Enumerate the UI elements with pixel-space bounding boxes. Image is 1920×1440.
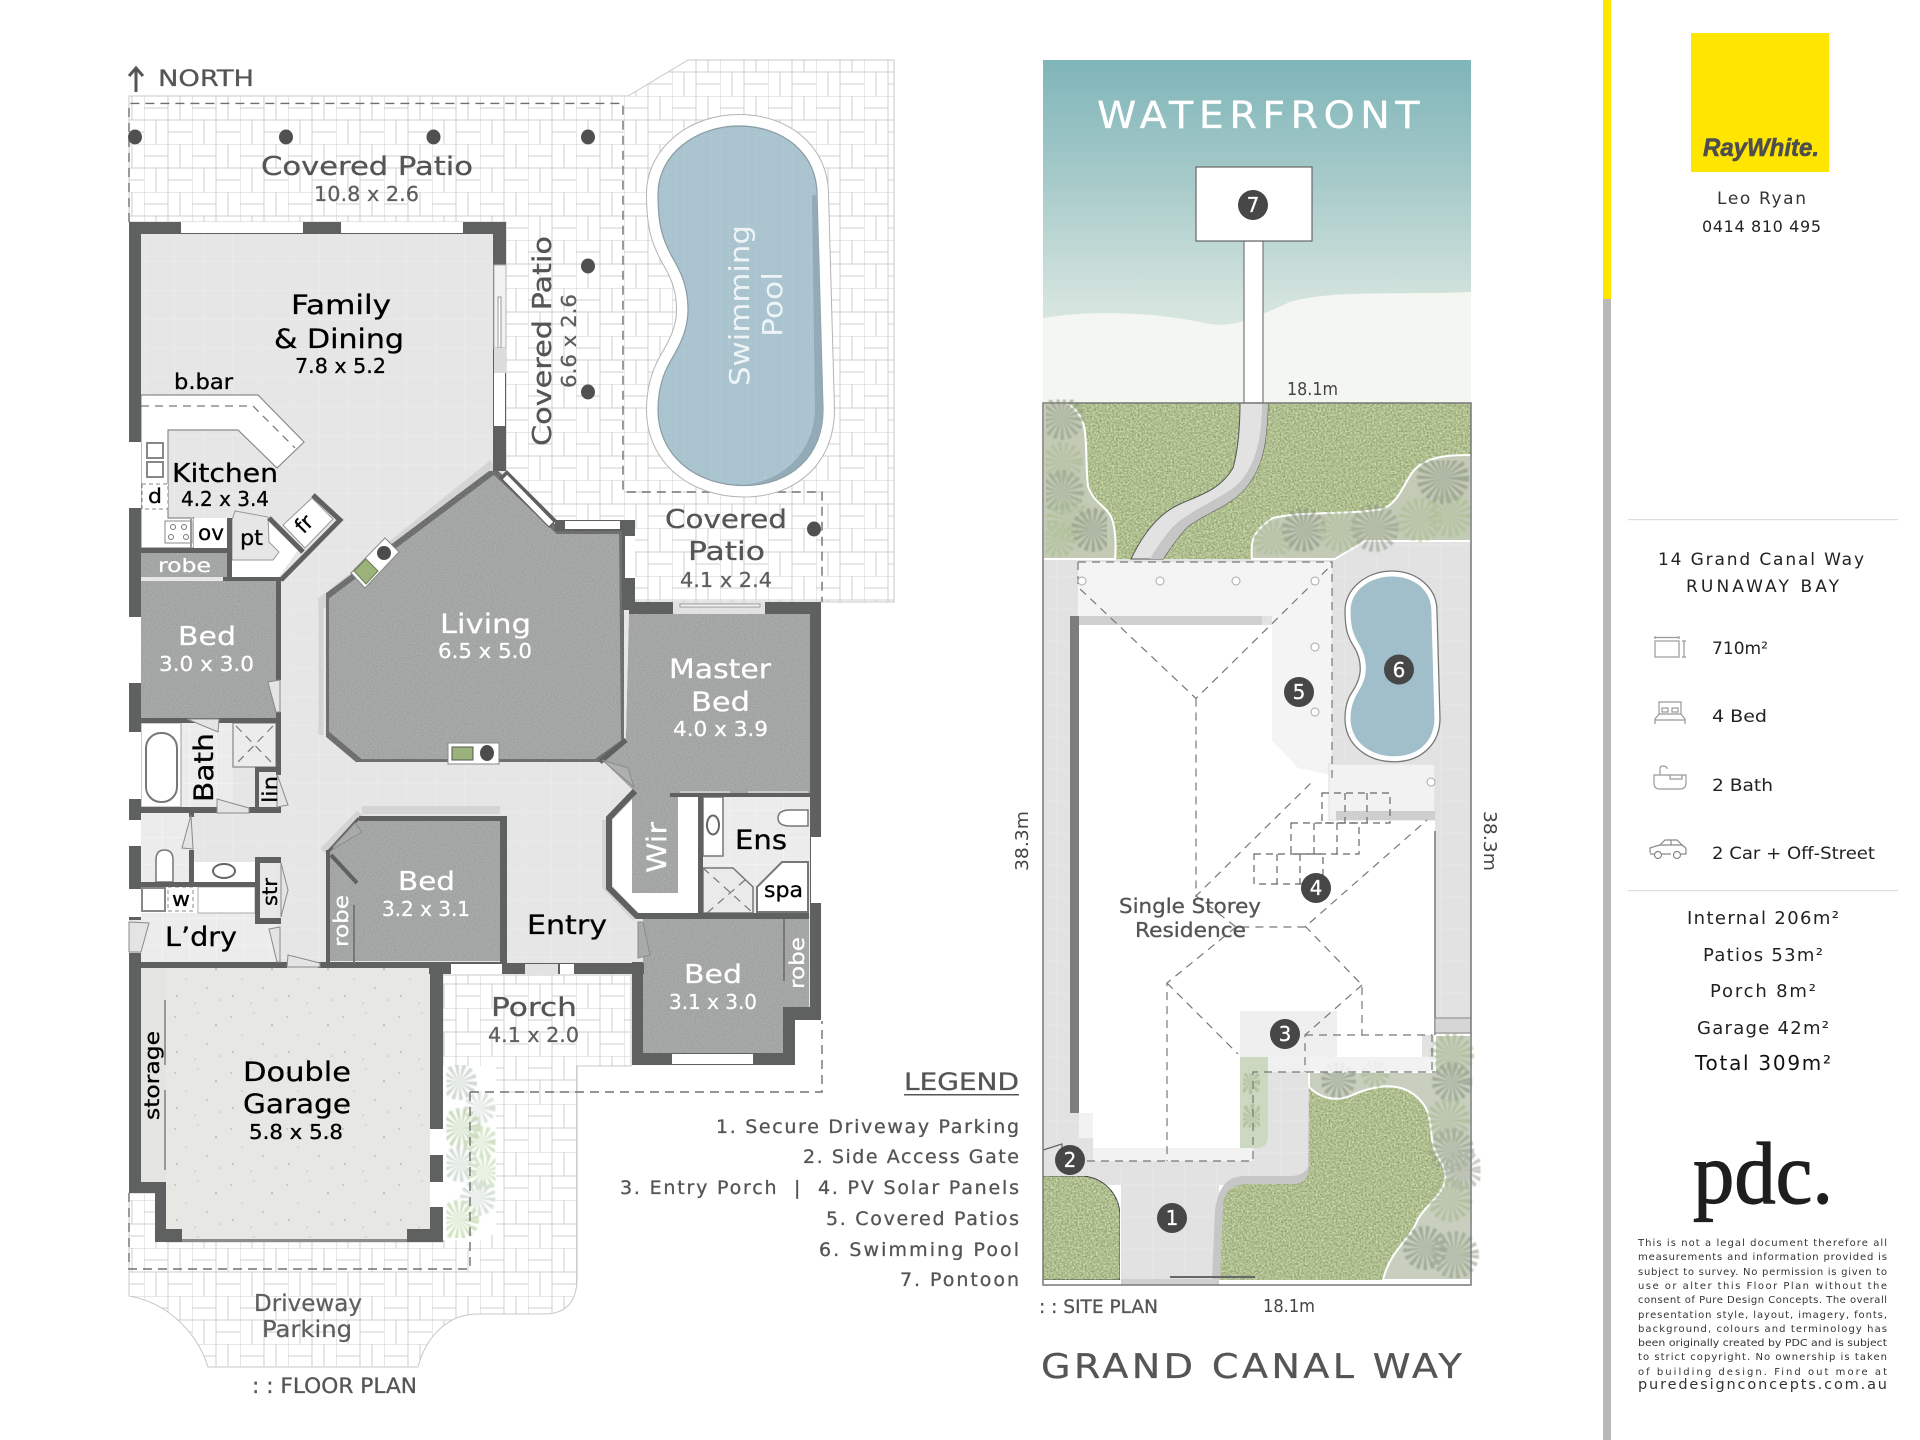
single storey residence label: Residence <box>1135 918 1246 942</box>
pdc logo: pdc. <box>1693 1126 1833 1223</box>
site number markers <box>1055 190 1414 1233</box>
legend items <box>620 1116 1019 1291</box>
label: family and dining: & Dining <box>274 324 404 355</box>
legal text: of building design. Find out more at <box>1638 1367 1887 1378</box>
label: robe east: robe <box>785 937 809 989</box>
label: covered patio north: Covered Patio <box>261 152 473 182</box>
marker 3: 3 <box>1279 1022 1291 1046</box>
label: bed 3.1 x 3.0 <box>669 960 757 1014</box>
house roof shadow <box>1079 616 1262 625</box>
sidebar <box>1603 0 1898 1440</box>
fridge <box>283 498 333 548</box>
room: garage <box>166 968 430 1242</box>
label: porch <box>488 993 579 1047</box>
label: bed 3.2 x 3.1: 3.2 x 3.1 <box>382 897 470 921</box>
label: linen: lin <box>258 776 282 803</box>
legend items: 6. Swimming Pool <box>819 1239 1019 1261</box>
label: bed 3.1 x 3.0: Bed <box>684 960 742 990</box>
legal text: presentation style, layout, imagery, fonts, <box>1638 1310 1887 1321</box>
label: double garage: 5.8 x 5.8 <box>249 1120 343 1144</box>
vanity <box>194 862 255 882</box>
label: master bed: Master <box>669 654 772 685</box>
label: kitchen fittings: fr <box>290 510 318 538</box>
legend items: 1. Secure Driveway Parking <box>716 1116 1019 1138</box>
label: spa: spa <box>764 878 803 902</box>
area summary: Porch 8m² <box>1710 981 1816 1002</box>
area summary: Internal 206m² <box>1687 908 1839 929</box>
legend <box>620 1068 1019 1291</box>
fireplace: living north <box>351 538 399 588</box>
label: bath: Bath <box>189 733 220 802</box>
pool on site plan <box>1345 571 1440 762</box>
label: kitchen: 4.2 x 3.4 <box>181 487 269 511</box>
legend items: 2. Side Access Gate <box>803 1146 1019 1168</box>
site boundary <box>1043 403 1471 1285</box>
land size value: 710m² <box>1712 639 1768 659</box>
parking value: 2 Car + Off-Street <box>1712 844 1875 864</box>
area summary: Garage 42m² <box>1697 1018 1829 1039</box>
rear paving <box>129 60 894 602</box>
marker 6: 6 <box>1393 658 1405 682</box>
label: bed 3.0 x 3.0 <box>159 622 254 676</box>
label: swimming pool <box>723 225 789 386</box>
legal text: use or alter this Floor Plan without the <box>1638 1281 1887 1292</box>
label: driveway parking: Driveway <box>254 1291 362 1317</box>
room: bed 3.0 x 3.0 <box>141 581 276 718</box>
label: swimming pool: Swimming <box>723 225 756 386</box>
north arrow and label: NORTH <box>158 67 254 92</box>
windows <box>129 222 821 1207</box>
label: store: str <box>258 877 282 906</box>
marker 5 <box>1284 677 1314 707</box>
rear width dimension: 18.1m <box>1287 379 1338 400</box>
shadow bands in hallway <box>321 465 636 918</box>
planter bed <box>443 1066 496 1240</box>
marker 1 <box>1157 1203 1187 1233</box>
jetty path <box>1131 403 1268 559</box>
boundary fence <box>1070 616 1079 1113</box>
entry planter <box>1240 1057 1268 1148</box>
front boundary strip <box>1043 1276 1471 1285</box>
label: double garage: Garage <box>243 1089 351 1120</box>
rear garden bed left <box>1043 403 1116 559</box>
label: kitchen: Kitchen <box>172 459 278 489</box>
label: covered patio south: Patio <box>688 537 765 567</box>
laundry <box>141 863 277 962</box>
concrete surrounds <box>1043 540 1471 1185</box>
legal text: background, colours and terminology has <box>1638 1324 1887 1335</box>
marker 4 <box>1301 873 1331 903</box>
patio posts site <box>1078 577 1319 716</box>
label: driveway parking: Parking <box>262 1317 352 1343</box>
room: master bed <box>602 614 810 793</box>
marker 1: 1 <box>1166 1206 1178 1230</box>
bedrooms value: 4 Bed <box>1712 707 1767 727</box>
doors <box>129 265 765 974</box>
agent details: Leo Ryan <box>1717 189 1806 209</box>
label: covered patio south: Covered <box>665 505 787 535</box>
label: double garage <box>243 1057 351 1144</box>
label: ensuite: Ens <box>735 825 787 856</box>
legal text: measurements and information provided is <box>1638 1252 1887 1263</box>
pantry <box>232 511 298 577</box>
label: breakfast bar: b.bar <box>174 370 233 394</box>
front lawn left <box>1043 1176 1120 1280</box>
label: living <box>438 609 532 663</box>
legal text: This is not a legal document therefore all <box>1637 1238 1887 1249</box>
street name: GRAND CANAL WAY <box>1041 1347 1465 1387</box>
label: covered patio south: 4.1 x 2.4 <box>680 568 772 592</box>
label: bed 3.1 x 3.0: 3.1 x 3.0 <box>669 990 757 1014</box>
label: master bed: 4.0 x 3.9 <box>673 717 768 741</box>
label: kitchen fittings: pt <box>240 526 263 550</box>
label: kitchen fittings: ov <box>198 521 224 545</box>
waterfront heading: WATERFRONT <box>1097 94 1425 137</box>
side dimension east: 38.3m <box>1479 811 1500 871</box>
label: bed 3.0 x 3.0: Bed <box>178 622 236 652</box>
address: RUNAWAY BAY <box>1686 577 1840 597</box>
label: master bed <box>669 654 772 741</box>
site driveway apron <box>1093 1148 1253 1161</box>
fireplace: living south <box>448 743 499 764</box>
sidebar bar <box>1603 0 1611 1440</box>
label: living: Living <box>440 609 531 640</box>
label: robe north: robe <box>158 555 211 577</box>
patio posts <box>128 130 821 536</box>
front paving and driveway <box>129 975 631 1367</box>
label: covered patio east: Covered Patio <box>528 236 558 446</box>
north arrow and label <box>129 67 254 92</box>
label: washer: w <box>172 887 190 911</box>
agent details: 0414 810 495 <box>1702 217 1821 236</box>
solar panels <box>1254 793 1390 884</box>
front garden lawn <box>1220 1035 1471 1280</box>
legal text <box>1637 1238 1887 1393</box>
icon: car <box>1650 840 1686 858</box>
front garden bed <box>1309 1035 1473 1280</box>
marker 7: 7 <box>1247 193 1259 217</box>
room: ensuite <box>703 797 810 914</box>
label: bed 3.2 x 3.1: Bed <box>398 867 455 897</box>
label: covered patio east <box>528 236 581 446</box>
driveway <box>1121 1180 1219 1285</box>
driveway shade <box>1212 1072 1309 1280</box>
legal text: consent of Pure Design Concepts. The overall <box>1638 1295 1887 1306</box>
single storey residence label <box>1119 894 1261 942</box>
floor plan panel <box>128 60 894 1398</box>
pontoon <box>1196 167 1312 241</box>
icon: bath <box>1654 766 1686 789</box>
labels: rooms <box>140 290 809 1343</box>
kitchen joinery <box>141 395 304 548</box>
marker 3 <box>1270 1019 1300 1049</box>
powder room <box>141 813 189 882</box>
label: kitchen <box>172 459 278 511</box>
label: walk in robe: Wir <box>642 821 673 873</box>
label: entry: Entry <box>527 910 607 941</box>
label: storage: storage <box>140 1031 164 1120</box>
label: bed 3.0 x 3.0: 3.0 x 3.0 <box>159 652 254 676</box>
sand <box>1043 292 1471 403</box>
pontoon walkway <box>1244 241 1263 403</box>
marker 2: 2 <box>1064 1148 1076 1172</box>
label: porch: 4.1 x 2.0 <box>488 1023 579 1047</box>
label: family and dining: Family <box>291 290 391 321</box>
label: master bed: Bed <box>691 687 750 718</box>
waterfront water <box>1043 60 1471 403</box>
legal text: to strict copyright. No ownership is taken <box>1638 1352 1887 1363</box>
legal text: been originally created by PDC and is subject <box>1638 1338 1887 1349</box>
label: laundry: L’dry <box>165 922 237 953</box>
roof lines <box>1078 562 1435 1161</box>
label: living: 6.5 x 5.0 <box>438 639 532 663</box>
marker 7 <box>1238 190 1268 220</box>
agent details <box>1702 189 1821 236</box>
area summary <box>1687 908 1839 1075</box>
legend heading: LEGEND <box>904 1068 1019 1096</box>
bathrooms value: 2 Bath <box>1712 776 1773 796</box>
room: bed 3.1 x 3.0 <box>643 919 809 1053</box>
label: porch: Porch <box>491 993 577 1023</box>
single storey residence label: Single Storey <box>1119 894 1261 918</box>
east side passage wall <box>1435 831 1471 1035</box>
patio overhang over garden <box>1309 1057 1435 1072</box>
side dimension west: 38.3m <box>1012 811 1033 871</box>
legend items: 3. Entry Porch | 4. PV Solar Panels <box>620 1177 1019 1199</box>
legend items: 7. Pontoon <box>900 1269 1019 1291</box>
room: bed 3.2 x 3.1 <box>330 821 500 961</box>
walls <box>129 222 821 1242</box>
legal text: puredesignconcepts.com.au <box>1638 1377 1887 1393</box>
address <box>1658 550 1864 597</box>
swimming pool <box>658 126 823 486</box>
patio roof lighter area <box>1078 562 1332 778</box>
area summary: Total 309m² <box>1694 1051 1831 1075</box>
floor plan caption: : : FLOOR PLAN <box>252 1374 417 1398</box>
icon: bed <box>1655 702 1685 724</box>
rear service patio <box>1329 764 1435 820</box>
marker 5: 5 <box>1293 680 1305 704</box>
label: bed 3.2 x 3.1 <box>382 867 470 921</box>
walk in robe <box>613 793 698 913</box>
label: kitchen fittings: d <box>148 484 162 508</box>
marker 2 <box>1055 1145 1085 1175</box>
marker 4: 4 <box>1310 876 1322 900</box>
entry porch roof <box>1240 1011 1337 1057</box>
ray white logo: RayWhite. <box>1703 134 1819 162</box>
label: covered patio south <box>665 505 787 592</box>
legal text: subject to survey. No permission is given to <box>1638 1267 1887 1278</box>
rear lawn <box>1043 403 1471 559</box>
label: family and dining <box>274 290 404 378</box>
entry patio overhang <box>1268 1057 1309 1072</box>
site plan panel <box>1012 60 1500 1387</box>
label: family and dining: 7.8 x 5.2 <box>295 354 386 378</box>
label: covered patio north <box>261 152 473 206</box>
building floor <box>129 222 821 1242</box>
room: robe north <box>141 553 227 577</box>
icon: land size <box>1655 636 1686 657</box>
covered patio dashed outlines <box>129 103 822 1269</box>
area summary: Patios 53m² <box>1703 945 1823 966</box>
side access gate <box>1043 1113 1093 1150</box>
label: double garage: Double <box>243 1057 351 1088</box>
label: robe west: robe <box>329 895 353 947</box>
site plan caption: : : SITE PLAN <box>1039 1296 1158 1318</box>
label: swimming pool: Pool <box>756 272 789 337</box>
room: storage <box>141 968 166 1182</box>
house roof <box>1079 625 1435 1148</box>
label: covered patio north: 10.8 x 2.6 <box>314 182 419 206</box>
label: covered patio east: 6.6 x 2.6 <box>557 294 581 388</box>
room: living <box>326 471 624 762</box>
legend items: 5. Covered Patios <box>826 1208 1019 1230</box>
label: kitchen fittings <box>148 484 318 550</box>
label: driveway parking <box>254 1291 362 1343</box>
bathroom <box>141 723 276 807</box>
front width dimension: 18.1m <box>1263 1296 1315 1317</box>
address: 14 Grand Canal Way <box>1658 550 1864 570</box>
rear garden bed right <box>1251 455 1471 559</box>
marker 6 <box>1384 654 1414 684</box>
labels: rear patios <box>261 152 789 592</box>
ray white logo <box>1691 33 1829 172</box>
